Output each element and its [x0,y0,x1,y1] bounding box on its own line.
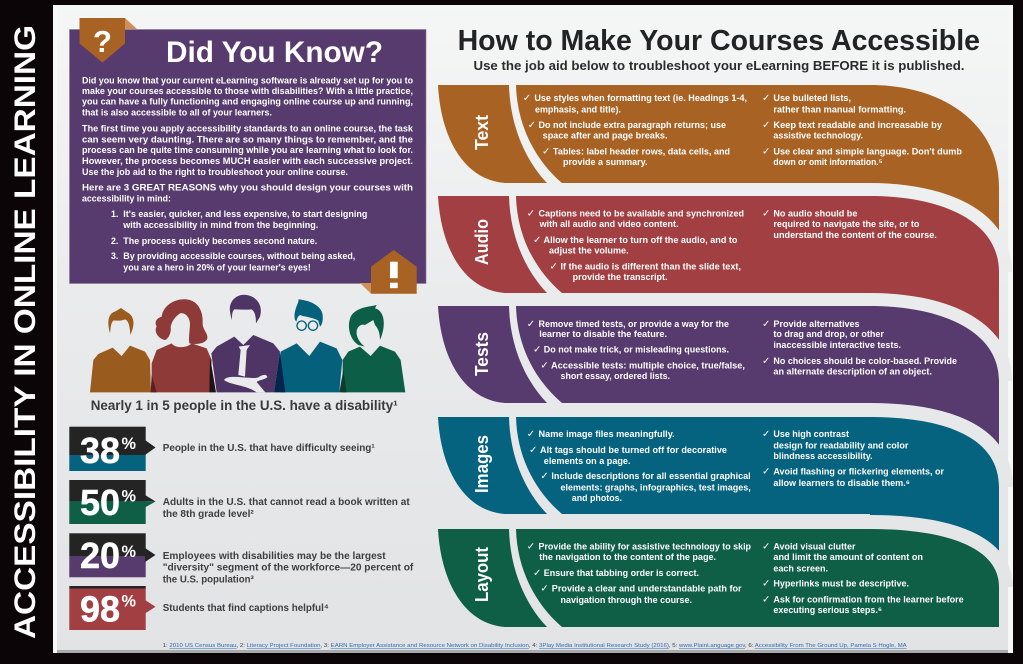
checklist: Tests left: short essay, ordered lists. [560,371,670,381]
checklist: Layout right: each screen. [773,564,828,574]
text block: intro: Did you know that your current eLearning software is already set up for you to [82,76,414,86]
checklist: Layout left [527,542,752,605]
text block: first time: can seem very daunting. There are so many things to remember, and the [82,134,413,144]
checklist: Audio left: ✓ [550,262,558,272]
text block: first time: The first time you apply accessibility standards to an online course, the task [82,124,413,134]
text block: reasons: with accessibility in mind from the beginning. [122,220,318,230]
label: Layout: Layout [472,547,492,602]
checklist: Tests left: Accessible tests: multiple choice, true/false, [551,360,745,370]
checklist: Audio left: with all audio and video content. [539,219,678,229]
checklist: Images right: ✓ [762,466,770,478]
checklist: Tests left: Remove timed tests, or provide a way for the [538,319,729,329]
text block: intro: that is also accessible to all of your learners. [82,108,272,118]
text block: intro [82,76,414,118]
checklist: Layout right: ✓ [762,542,770,552]
text block: reasons: Here are 3 GREAT REASONS why you should design your courses with [82,182,413,192]
checklist: Text right: ✓ [762,120,770,131]
checklist: Layout right: ✓ [762,578,770,590]
text block: reasons: By providing accessible courses, without being asked, [123,251,355,261]
checklist: Tests right: ✓ [762,319,770,330]
text block: first time: Use the job aid to the right to troubleshoot your online course. [82,167,348,177]
checklist: Layout right: executing serious steps.⁶ [773,605,882,615]
checklist: Tests right: an alternate description of an object. [773,366,932,376]
panel: Tests band [438,306,999,500]
text block: reasons [82,182,413,272]
footnotes: 1: 2010 US Census Bureau , 2: Literacy Project Foundation , 3: EARN Employer Assistance and Resource Network on Disability Inclusion , 4: 3Play Media Institutional Research Study (2016) , 5: www.PlainLanguage.gov , 6: Accessibility From The Ground Up, Pamela S Hogle, MA [163,643,908,649]
stat: 38 percent: People in the U.S. that have difficulty seeing¹ [163,443,375,454]
text block: reasons: The process quickly becomes second nature. [123,236,317,246]
icon: question mark tag: ? [93,24,112,59]
checklist: Text right: rather than manual formatting. [773,104,906,114]
stat: 20 percent: the U.S. population³ [163,574,254,586]
stat: 98 percent: % [122,592,136,611]
label: Audio: Audio [472,219,492,265]
heading: nearly 1 in 5: Nearly 1 in 5 people in the U.S. have a disability¹ [91,397,398,413]
panel: Text band [438,85,999,285]
stat: 98 percent: Students that find captions helpful⁴ [163,603,329,614]
checklist: Audio left: ✓ [533,235,541,246]
stat: 50 percent: % [122,487,136,506]
checklist: Images right: Avoid flashing or flickering elements, or [773,466,945,476]
checklist: Text left: ✓ [528,120,536,131]
checklist: Text left: provide a summary. [563,157,648,167]
checklist: Tests right: No choices should be color-based. Provide [773,356,957,366]
stat: 20 percent: "diversity" segment of the workforce—20 percent of [163,562,414,574]
checklist: Layout left: ✓ [540,584,549,594]
checklist: Tests right: inaccessible interactive tests. [773,340,901,350]
checklist: Tests left: learner to disable the feature. [539,329,667,339]
checklist: Audio left [527,208,744,282]
text block: first time: process can be quite time consuming while you are learning what to look for. [82,145,413,155]
checklist: Text left: ✓ [542,146,550,158]
checklist: Layout left: Ensure that tabbing order is correct. [544,568,699,578]
checklist: Layout right: Avoid visual clutter [773,542,856,552]
text block: reasons: 2. [111,236,118,246]
stat: 20 percent: Employees with disabilities may be the largest [163,551,386,562]
checklist: Text right: assistive technology. [773,130,863,140]
checklist: Layout left: Provide the ability for assistive technology to skip [538,542,752,552]
checklist: Layout right: Hyperlinks must be descriptive. [773,578,909,588]
illustration: five people silhouettes [90,295,405,392]
text block: first time: However, the process becomes MUCH easier with each successive project. [82,156,413,166]
checklist: Audio left: adjust the volume. [549,246,629,256]
checklist: Text right: Use clear and simple language. Don't dumb [773,146,963,156]
checklist: Text left: Use styles when formatting text (ie. Headings 1-4, [534,93,747,103]
checklist: Images left [527,429,751,503]
checklist: Layout right: ✓ [762,594,770,606]
checklist: Text right: ✓ [762,93,770,104]
stat: 98 percent: 98 [80,589,120,630]
checklist: Tests right: ✓ [762,356,770,367]
checklist: Tests right: Provide alternatives [773,319,860,329]
checklist: Text left: emphasis, and title). [535,104,621,114]
text block: first time [82,124,413,177]
vertical title: ACCESSIBILITY IN ONLINE LEARNING [9,25,42,639]
checklist: Audio right [762,208,937,240]
checklist: Layout left: navigation through the course. [560,595,692,605]
checklist: Audio right: No audio should be [773,208,857,218]
stat: 38 percent: 38 [80,430,120,471]
checklist: Text right: down or omit information.⁵ [773,157,883,167]
stat: 38 percent [69,427,375,471]
stat: 20 percent [69,533,414,586]
panel: Audio band [438,196,999,390]
person: green [339,305,405,392]
checklist: Images right: design for readability and color [773,440,909,450]
checklist: Layout left: Provide a clear and understandable path for [552,584,742,594]
icon: question mark tag [80,18,137,62]
checklist: Tests left: ✓ [527,319,535,330]
checklist: Audio left: Allow the learner to turn off the audio, and to [544,235,738,245]
checklist: Tests left: ✓ [533,344,541,356]
checklist: Audio left: provide the transcript. [573,272,668,282]
checklist: Text right [762,93,963,167]
checklist: Tests left [527,319,745,381]
stat: 98 percent [69,586,329,630]
person: teal with glasses [274,299,342,392]
checklist: Images left: ✓ [529,445,537,456]
subtitle: Use the job aid below to troubleshoot your eLearning BEFORE it is published. [474,58,964,73]
checklist: Images left: ✓ [527,429,535,440]
checklist: Images left: Include descriptions for all essential graphical [551,471,751,481]
checklist: Images left: Alt tags should be turned off for decorative [540,445,727,455]
checklist: Audio right: required to navigate the site, or to [773,219,920,229]
checklist: Images left: Name image files meaningfully. [538,429,675,439]
panel: did you know [70,18,426,294]
checklist: Audio right: understand the content of the course. [773,230,937,240]
text block: reasons: It's easier, quicker, and less expensive, to start designing [123,209,367,219]
text block: reasons: 3. [111,251,118,261]
checklist: Layout right: Ask for confirmation from the learner before [773,594,964,604]
stat: 20 percent: 20 [80,535,120,576]
checklist: Layout right: and limit the amount of content on [773,552,923,562]
stat: 50 percent: the 8th grade level² [163,509,254,520]
checklist: Audio right: ✓ [762,208,770,220]
checklist: Text left: space after and page breaks. [543,130,668,140]
checklist: Images left: and photos. [572,493,622,503]
checklist: Text left: Do not include extra paragraph returns; use [538,120,726,130]
checklist: Tests left: Do not make trick, or misleading questions. [544,344,729,354]
stat: 50 percent: 50 [80,482,120,523]
text block: reasons: 1. [111,209,118,219]
stat: 38 percent: % [122,434,136,453]
stat: 50 percent [69,480,410,524]
checklist: Images right: blindness accessibility. [773,451,872,461]
checklist: Layout left: the navigation to the content of the page. [539,552,716,562]
icon: exclamation house [360,250,417,294]
heading: did you know: Did You Know? [166,36,383,69]
checklist: Text right: Use bulleted lists, [773,93,851,103]
stat: 20 percent: % [122,542,136,561]
checklist: Images right: Use high contrast [773,429,849,439]
checklist: Images right [762,429,945,488]
checklist: Layout right [762,542,964,615]
checklist: Images right: ✓ [762,429,770,440]
text block: intro: make your courses accessible to those with disabilities? With a little practice, [82,86,413,96]
checklist: Images left: ✓ [540,471,549,482]
checklist: Images left: elements: graphs, infographics, test images, [560,482,751,492]
person: orange [90,308,151,392]
panel: Images band [438,417,999,600]
text block: intro: you can have a fully functioning and engaging online course up and running, [82,96,413,106]
checklist: Audio left: ✓ [527,208,535,220]
checklist: Text left [523,93,747,167]
checklist: Images right: allow learners to disable them.⁶ [773,478,910,488]
checklist: Layout left: ✓ [527,542,535,552]
person: purple with tie [209,295,280,392]
checklist: Tests right [762,319,957,376]
title: how to make your courses accessible: How to Make Your Courses Accessible [458,25,980,57]
checklist: Audio left: If the audio is different than the slide text, [560,262,741,272]
text block: reasons: accessibility in mind: [82,194,171,204]
label: Tests: Tests [472,332,492,376]
checklist: Text right: Keep text readable and increasable by [773,120,942,130]
checklist: Tests right: to drag and drop, or other [773,329,884,339]
checklist: Audio left: Captions need to be available and synchronized [538,208,744,218]
checklist: Tests left: ✓ [540,360,549,372]
checklist: Images left: elements on a page. [544,456,630,466]
checklist: Text left: ✓ [523,93,531,104]
text block: reasons: you are a hero in 20% of your learner's eyes! [123,262,311,272]
person: red [151,299,212,392]
stat: 50 percent: Adults in the U.S. that cannot read a book written at [163,497,410,508]
checklist: Layout left: ✓ [533,568,541,579]
label: Text: Text [472,115,492,150]
checklist: Text left: Tables: label header rows, data cells, and [553,146,730,156]
label: Images: Images [472,435,492,493]
checklist: Text right: ✓ [762,146,770,158]
panel: Layout band [438,529,999,627]
